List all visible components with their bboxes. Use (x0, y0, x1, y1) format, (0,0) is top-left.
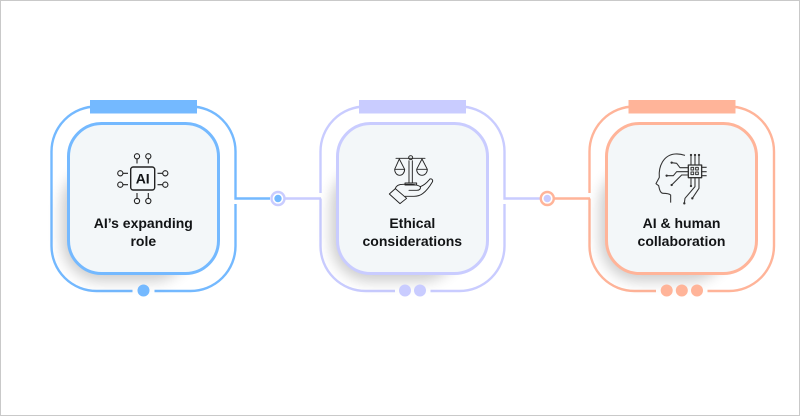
card shadow (331, 165, 461, 281)
card title: collaboration (638, 233, 725, 249)
panel: Ethical considerations (320, 100, 540, 296)
card title (638, 215, 725, 249)
card title: AI & human (643, 215, 720, 231)
card title (94, 215, 193, 249)
outer outline (320, 106, 540, 291)
top tab (359, 100, 466, 114)
icon: AI chip (118, 154, 168, 204)
card title (363, 215, 462, 249)
icon: scales on hand (389, 156, 433, 204)
icon: AI head with chip (656, 154, 707, 204)
card title: AI’s expanding (94, 215, 193, 231)
connector node 1 (272, 192, 321, 205)
card shadow (62, 165, 192, 281)
icon label: AI: AI (136, 171, 150, 187)
panel: AI's expanding role (52, 100, 270, 296)
card title: considerations (363, 233, 462, 249)
inner card (68, 124, 218, 274)
card shadow (600, 165, 730, 281)
top tab (90, 100, 197, 114)
top tab (628, 100, 736, 114)
card title: Ethical (389, 215, 435, 231)
inner card (338, 124, 488, 274)
step dot (138, 284, 150, 296)
panel: AI & human collaboration (590, 100, 774, 296)
outer outline (590, 106, 774, 291)
step dots (399, 284, 426, 296)
connector node 2 (541, 192, 590, 205)
inner card (606, 124, 756, 274)
step dots (661, 284, 703, 296)
card title: role (130, 233, 156, 249)
outer outline (52, 106, 270, 291)
